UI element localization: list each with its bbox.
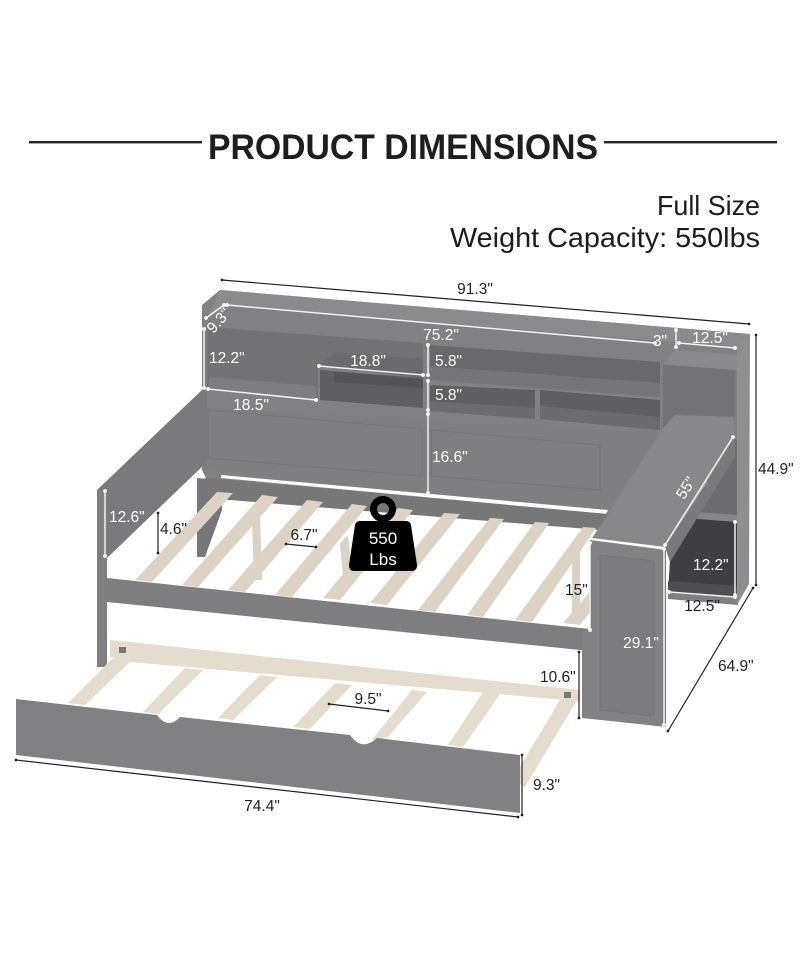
- weight badge: 550 lbs: [349, 500, 417, 571]
- dimension: tower width 12.5: [679, 330, 735, 348]
- headboard bookcase: [202, 290, 750, 520]
- dimension: top shelf 75.2: 75.2": [423, 327, 459, 344]
- centre support legs: [252, 515, 580, 617]
- dimension: shelf 18.8: 18.8": [350, 353, 386, 370]
- left arm rest: [97, 390, 207, 667]
- dimension: depth 64.9: 64.9": [718, 658, 754, 675]
- subtitle: size and weight capacity: Weight Capacity: 550lbs: [450, 222, 760, 253]
- dimension: overall width 91.3: [222, 280, 749, 324]
- dimension: cabinet height 29.1: 29.1": [623, 635, 659, 652]
- trundle casters: [119, 647, 571, 698]
- dimension: left cubby height 12.2: 12.2": [209, 350, 245, 367]
- dimension: height 44.9: 44.9": [758, 461, 794, 478]
- dimension: trundle slat gap 9.5: 9.5": [354, 691, 382, 708]
- dimension: left cubby width 18.5: [208, 389, 316, 414]
- dimension: left cubby height 12.2: [204, 329, 245, 388]
- dimension: side rail 4.6: [158, 513, 187, 553]
- dimension: overall width 91.3: 91.3": [457, 281, 493, 298]
- subtitle: size and weight capacity: Full Size: [657, 190, 760, 221]
- dimension: upper shelf 5.8: 5.8": [435, 353, 462, 370]
- dimension: desk length 55: 55": [673, 474, 700, 502]
- bed illustration: [16, 290, 750, 813]
- dimension: arm height 12.6: [105, 491, 145, 556]
- title: PRODUCT DIMENSIONS: [208, 128, 598, 167]
- front rail: [107, 578, 590, 651]
- white gap above slat rail: [221, 475, 608, 514]
- dimension: lower shelf 5.8: 5.8": [435, 387, 462, 404]
- dimension: clearance 10.6: [540, 652, 579, 718]
- dimension: trundle width 74.4: 74.4": [244, 798, 280, 815]
- dimension: headboard 16.6: 16.6": [432, 449, 468, 466]
- dimension: lower cubby width 12.5: [669, 592, 735, 615]
- weight badge: 550 lbs: 550: [369, 529, 397, 548]
- trundle frame: [68, 640, 580, 787]
- dimension: lower cubby width 12.5: 12.5": [684, 598, 720, 615]
- subtitle: size and weight capacity: [450, 190, 760, 253]
- lower right shelf unit: [668, 334, 750, 605]
- back left post: [197, 478, 222, 557]
- dimension: lower cubby height 12.2: [693, 522, 735, 595]
- dimension: trundle height 9.3: 9.3": [533, 777, 560, 794]
- trundle drawer front: [16, 699, 520, 813]
- dimension: top shelf 75.2: [227, 305, 655, 344]
- storage cabinet and desk: [582, 415, 735, 727]
- bed slats: [135, 492, 600, 625]
- dimension: left cubby width 18.5: 18.5": [233, 397, 269, 414]
- dimension: divider 3: 3": [653, 333, 667, 350]
- dimension: side rail 4.6: 4.6": [160, 521, 187, 538]
- dimension: desk length 55: [665, 437, 733, 545]
- dimension: arm height 12.6: 12.6": [109, 509, 145, 526]
- dimension: trundle height 9.3: [522, 755, 560, 815]
- dimension: trundle slat gap 9.5: [329, 691, 388, 711]
- dimension: slat gap 6.7: 6.7": [290, 527, 318, 544]
- dimension: upper shelf 5.8: [428, 345, 462, 375]
- dimension: headboard 16.6: [428, 414, 468, 493]
- dimension: leg 15: 15": [565, 582, 588, 599]
- dimension: tower width 12.5: 12.5": [692, 330, 728, 347]
- dimension: leg 15: [565, 543, 590, 630]
- dimension: lower cubby height 12.2: 12.2": [693, 557, 729, 574]
- dimension: trundle width 74.4: [16, 760, 518, 817]
- dimension: depth 64.9: [668, 588, 754, 731]
- dimension: shelf depth 9.3: 9.3": [204, 305, 234, 337]
- dimension: divider 3: [653, 330, 676, 350]
- dimension: shelf 18.8: [319, 353, 423, 375]
- dimension: clearance 10.6: 10.6": [540, 669, 576, 686]
- back slat rail: [205, 478, 608, 530]
- dimension: lower shelf 5.8: [428, 381, 462, 410]
- weight badge: 550 lbs: Lbs: [369, 550, 397, 569]
